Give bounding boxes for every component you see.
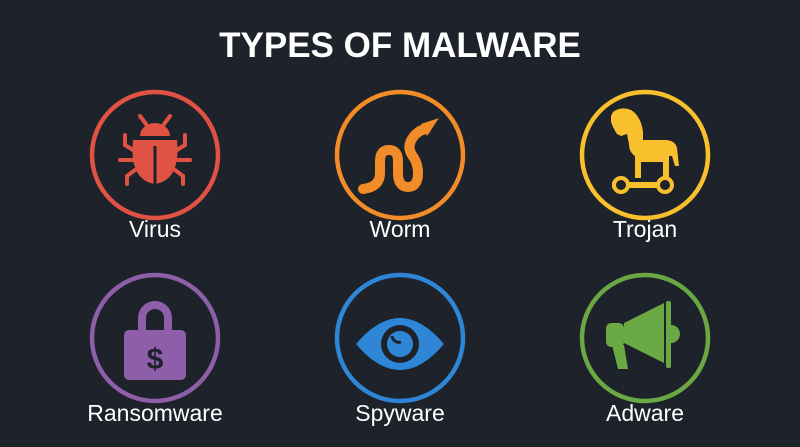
- label: Worm: [370, 216, 430, 242]
- panel: virus: [92, 92, 218, 242]
- icon: worm: [363, 129, 426, 189]
- label: Adware: [606, 400, 684, 426]
- label: Spyware: [355, 400, 445, 426]
- panel: worm: [337, 92, 463, 242]
- panel: ransomware: [87, 275, 223, 426]
- label: Ransomware: [87, 400, 223, 426]
- icon: eye: [356, 318, 444, 370]
- panel: spyware: [337, 275, 463, 426]
- panel: adware: [582, 275, 708, 426]
- icon: padlock with dollar: $: [147, 343, 164, 376]
- label: Trojan: [613, 216, 677, 242]
- icon: trojan horse: [611, 108, 679, 192]
- icon: bug: [120, 116, 190, 184]
- icon: megaphone: [606, 301, 680, 369]
- label: Virus: [129, 216, 181, 242]
- title: TYPES OF MALWARE: [219, 26, 581, 65]
- icon: padlock with dollar: [124, 305, 186, 380]
- panel: trojan: [582, 92, 708, 242]
